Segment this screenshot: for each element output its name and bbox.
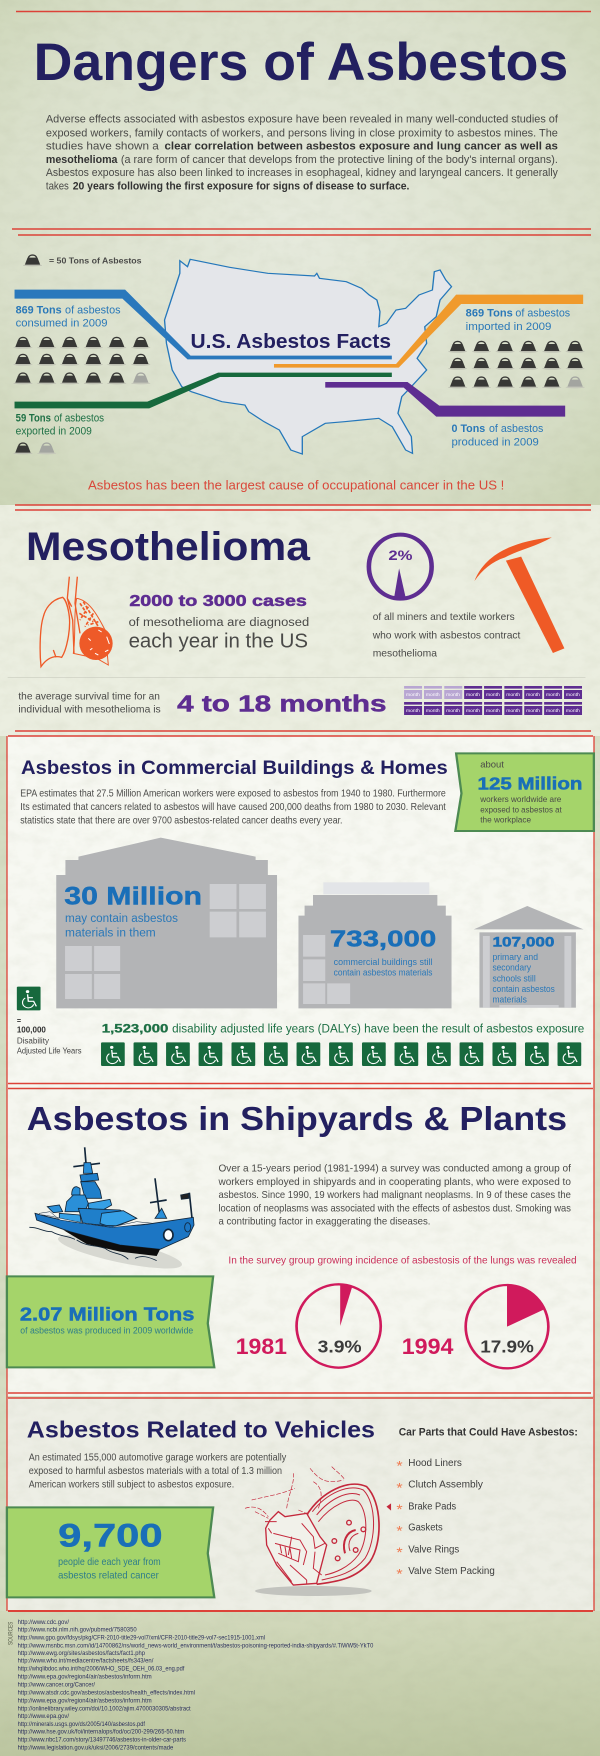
calendar months: month (446, 692, 460, 697)
stat: produced: produced in 2009 (452, 435, 539, 448)
text: miners: mesothelioma (373, 648, 437, 659)
icon: pickaxe (474, 537, 564, 653)
intro paragraph (46, 112, 559, 192)
purple band: produced (325, 382, 565, 417)
calendar months: month (426, 708, 440, 713)
heading: U.S. Asbestos Facts: U.S. Asbestos Facts (191, 330, 391, 353)
legend: wheelchair = 100,000 DALYs: Adjusted Life Years (17, 1046, 82, 1055)
small building: 107,000: primary and (492, 953, 538, 963)
section: commercial buildings (17, 753, 594, 1066)
icon: brake disc (245, 1467, 379, 1596)
calendar months: month (486, 708, 500, 713)
pie: 1981 3.9%: 1981 (236, 1335, 287, 1360)
source links: http://www.gpo.gov/fdsys/pkg/CFR-2010-title29-vol7/xml/CFR-2010-title29-vol7-sec1915-1001.xml (18, 1635, 265, 1641)
green banner: 9,700: 9,700 (58, 1518, 163, 1554)
parts list: * (396, 1523, 403, 1539)
green banner: 2.07 million tons: 2.07 Million Tons (20, 1305, 194, 1325)
parts list: * (396, 1459, 403, 1474)
parts list: Gaskets (408, 1522, 443, 1533)
calendar months (404, 686, 582, 715)
heading: Asbestos Related to Vehicles (27, 1417, 375, 1443)
intro paragraph: mesothelioma (46, 153, 118, 166)
small building: 107,000 (474, 906, 584, 1008)
weights: consumed (13, 337, 150, 384)
source links: http://minerals.usgs.gov/ds/2005/140/asbestos.pdf (18, 1722, 145, 1728)
calendar months: month (566, 708, 580, 713)
icon: battleship (29, 1147, 194, 1275)
stat: exported (16, 411, 104, 437)
source links: http://www.who.int/mediacentre/factsheets/fs343/en/ (18, 1659, 154, 1665)
small building: 107,000: contain asbestos (492, 985, 555, 995)
paragraph: American workers still subject to asbestos exposure. (29, 1480, 234, 1490)
small building: 107,000: schools still (492, 974, 536, 984)
green banner: 125 million: the workplace (480, 815, 531, 825)
calendar months: month (466, 692, 480, 697)
text: miners: who work with asbestos contract (372, 630, 520, 641)
large building: 30 million: 30 Million (64, 881, 202, 910)
stat: consumed: consumed in 2009 (16, 316, 108, 329)
stat: exported: 59 Tons (16, 411, 51, 424)
survival text: the average survival time for an (18, 691, 160, 702)
medium building: 733,000 (298, 882, 452, 1008)
sources label: SOURCES (7, 1622, 14, 1645)
legend: wheelchair = 100,000 DALYs: = (17, 1016, 21, 1025)
icon: lungs (40, 577, 113, 667)
source links: http://www.nbc17.com/story/13497746/asbestos-in-older-car-parts (18, 1738, 186, 1744)
calendar months: month (526, 708, 540, 713)
intro paragraph: 20 years following the first exposure for signs of disease to surface. (73, 179, 409, 192)
paragraph (29, 1453, 287, 1490)
stat: imported: imported in 2009 (466, 320, 552, 333)
paragraph (218, 1163, 571, 1227)
calendar months: month (426, 692, 440, 697)
text: miners: of all miners and textile workers (373, 612, 515, 623)
medium building: 733,000: commercial buildings still (334, 958, 432, 968)
medium building: 733,000: 733,000 (330, 926, 436, 952)
legend: wheelchair = 100,000 DALYs: Disability (17, 1036, 49, 1045)
heading: Asbestos in Commercial Buildings & Homes (21, 757, 448, 779)
heading: Asbestos in Shipyards & Plants (27, 1100, 567, 1137)
intro paragraph: clear correlation between asbestos exposure and lung cancer as well as (165, 139, 558, 152)
green band: exported (15, 373, 392, 408)
paragraph (20, 788, 446, 826)
source links: http://onlinelibrary.wiley.com/doi/10.1002/ajim.4700030305/abstract (18, 1706, 191, 1712)
stat: consumed: 869 Tons (16, 303, 62, 316)
green banner: 2.07 million tons: of asbestos was produced in 2009 worldwide (20, 1326, 193, 1336)
stat: 2000 to 3000 cases: of mesothelioma are diagnosed (129, 615, 309, 629)
section: intro (34, 34, 568, 192)
paragraph: exposed to harmful asbestos materials with a total of 1.3 million (29, 1467, 282, 1477)
section: shipyards (7, 1100, 577, 1368)
large building: 30 million: materials in them (65, 926, 156, 939)
green banner: 9,700 (7, 1507, 214, 1597)
pointer arrow (386, 1503, 391, 1511)
stat: produced: of asbestos (489, 422, 543, 435)
source links: http://www.ncbi.nlm.nih.gov/pubmed/7580350 (18, 1628, 137, 1634)
legend: weight = 50 tons (23, 255, 142, 266)
stat: 2000 to 3000 cases (129, 593, 309, 652)
paragraph: a contributing factor in exaggerating the diseases. (218, 1216, 430, 1227)
calendar months: month (566, 692, 580, 697)
weights: imported (448, 341, 585, 388)
stat: exported: of asbestos (54, 411, 104, 424)
section: U.S. asbestos facts (13, 255, 585, 492)
source links: http://www.cdc.gov/ (18, 1620, 69, 1626)
legend: wheelchair = 100,000 DALYs: 100,000 (17, 1025, 46, 1035)
calendar months: month (486, 692, 500, 697)
source links: http://www.epa.gov/region4/air/asbestos/inform.htm (18, 1675, 152, 1681)
parts list: Clutch Assembly (408, 1479, 483, 1490)
stat: 4 to 18 months: 4 to 18 months (177, 692, 386, 717)
green banner: 125 million: exposed to asbestos at (480, 805, 562, 814)
pie: 2 percent (369, 535, 432, 599)
orange band: imported (274, 295, 583, 368)
stat: imported (466, 306, 570, 333)
parts list (396, 1458, 495, 1582)
green banner: 9,700: people die each year from (58, 1558, 161, 1568)
survival text (18, 691, 161, 715)
calendar months: month (446, 708, 460, 713)
green banner: 2.07 million tons (7, 1276, 214, 1367)
small building: 107,000: materials (492, 995, 527, 1005)
blue band: consumed (15, 290, 392, 359)
green banner: 125 million (455, 753, 594, 831)
stat: consumed: of asbestos (65, 303, 121, 316)
pie: 1981 3.9% (236, 1284, 381, 1368)
pie: 1994 17.9%: 17.9% (480, 1337, 534, 1356)
section: mesothelioma (8, 525, 585, 717)
parts list: Valve Stem Packing (408, 1566, 495, 1577)
source links: http://www.epa.gov/region4/air/asbestos/inform.htm (18, 1698, 152, 1704)
paragraph: An estimated 155,000 automotive garage workers are potentially (29, 1453, 287, 1463)
stat: 2000 to 3000 cases: 2000 to 3000 cases (129, 593, 307, 610)
stat: imported: 869 Tons (466, 306, 513, 319)
parts list: * (396, 1480, 403, 1496)
stat: produced: 0 Tons (452, 422, 485, 435)
pie: 1981 3.9%: 3.9% (318, 1337, 362, 1356)
sources (7, 1620, 374, 1751)
source links (18, 1620, 374, 1751)
calendar months: month (526, 692, 540, 697)
green banner: 125 million: workers worldwide are (479, 795, 561, 804)
large building: 30 million (56, 838, 277, 1008)
pie: 1994 17.9% (402, 1285, 548, 1368)
DALY statement: 1,523,000 (102, 1021, 168, 1035)
source links: http://www.cancer.org/Cancer/ (18, 1683, 95, 1689)
section: vehicles (7, 1417, 578, 1597)
source links: http://www.legislation.gov.uk/uksi/2006/2739/contents/made (18, 1745, 174, 1751)
US map (165, 259, 452, 454)
wheelchair icon row (101, 1042, 581, 1066)
legend: wheelchair = 100,000 DALYs (17, 987, 82, 1055)
source links: http://www.hse.gov.uk/foi/internalops/fod/oc/200-299/265-50.htm (18, 1730, 184, 1736)
stat: exported: exported in 2009 (16, 424, 92, 437)
parts list: Hood Liners (408, 1458, 462, 1469)
source links: http://www.atsdr.cdc.gov/asbestos/asbestos/health_effects/index.html (18, 1690, 195, 1696)
source links: http://www.msnbc.msn.com/id/14700862/ns/world_news-world_environment/t/asbestos-poisoning-reported-india-shipyards/#.TiWW5t-YkT0 (18, 1643, 374, 1649)
calendar months: month (506, 708, 520, 713)
calendar months: month (406, 708, 420, 713)
survival text: individual with mesothelioma is (18, 704, 161, 715)
medium building: 733,000: contain asbestos materials (334, 968, 432, 978)
parts list: * (396, 1567, 403, 1582)
source links: http://www.epa.gov/ (18, 1714, 69, 1720)
pie: 2 percent: 2% (388, 548, 412, 564)
stat: imported: of asbestos (515, 306, 570, 319)
stat: 2000 to 3000 cases: each year in the US (129, 630, 308, 652)
source links: http://www.ewg.org/sites/asbestos/facts/fact1.php (18, 1651, 146, 1657)
source links: http://whqlibdoc.who.int/hq/2006/WHO_SDE_OEH_06.03_eng.pdf (18, 1667, 185, 1673)
stat: produced (452, 422, 543, 448)
divider (8, 676, 585, 678)
intro paragraph: studies have shown a (46, 139, 159, 152)
legend: weight = 50 tons: = 50 Tons of Asbestos (49, 256, 142, 265)
weights: exported (13, 443, 56, 454)
calendar months: month (546, 692, 560, 697)
parts list: * (396, 1502, 403, 1518)
intro paragraph: takes (46, 179, 69, 192)
heading: Mesothelioma: Mesothelioma (26, 525, 311, 569)
parts list: * (396, 1545, 403, 1561)
calendar months: month (406, 692, 420, 697)
paragraph: Its estimated that cancers related to asbestos will have caused 200,000 deaths from 1980 to 2030. Relevant (20, 802, 446, 813)
paragraph: EPA estimates that 27.5 Million American workers were exposed to asbestos from 1940 to 1980. Furthermore (20, 788, 446, 799)
small building: 107,000: secondary (492, 963, 531, 973)
calendar months: month (466, 708, 480, 713)
green banner: 125 million: about (480, 760, 504, 770)
large building: 30 million: may contain asbestos (65, 912, 178, 925)
green banner: 125 million: 125 Million (478, 774, 582, 793)
paragraph: statistics state that there are over 9700 asbestos-related cancer deaths every year. (20, 815, 342, 826)
red callout: Asbestos has been the largest cause of occupational cancer in the US ! (88, 478, 504, 492)
text: miners (372, 612, 520, 659)
small building: 107,000: 107,000 (492, 935, 554, 950)
pie: 1994 17.9%: 1994 (402, 1335, 454, 1360)
parts list: Brake Pads (408, 1501, 456, 1512)
calendar months: month (546, 708, 560, 713)
stat: consumed (16, 303, 121, 329)
parts list: Valve Rings (408, 1544, 460, 1555)
calendar months: month (506, 692, 520, 697)
green banner: 9,700: asbestos related cancer (58, 1571, 159, 1581)
